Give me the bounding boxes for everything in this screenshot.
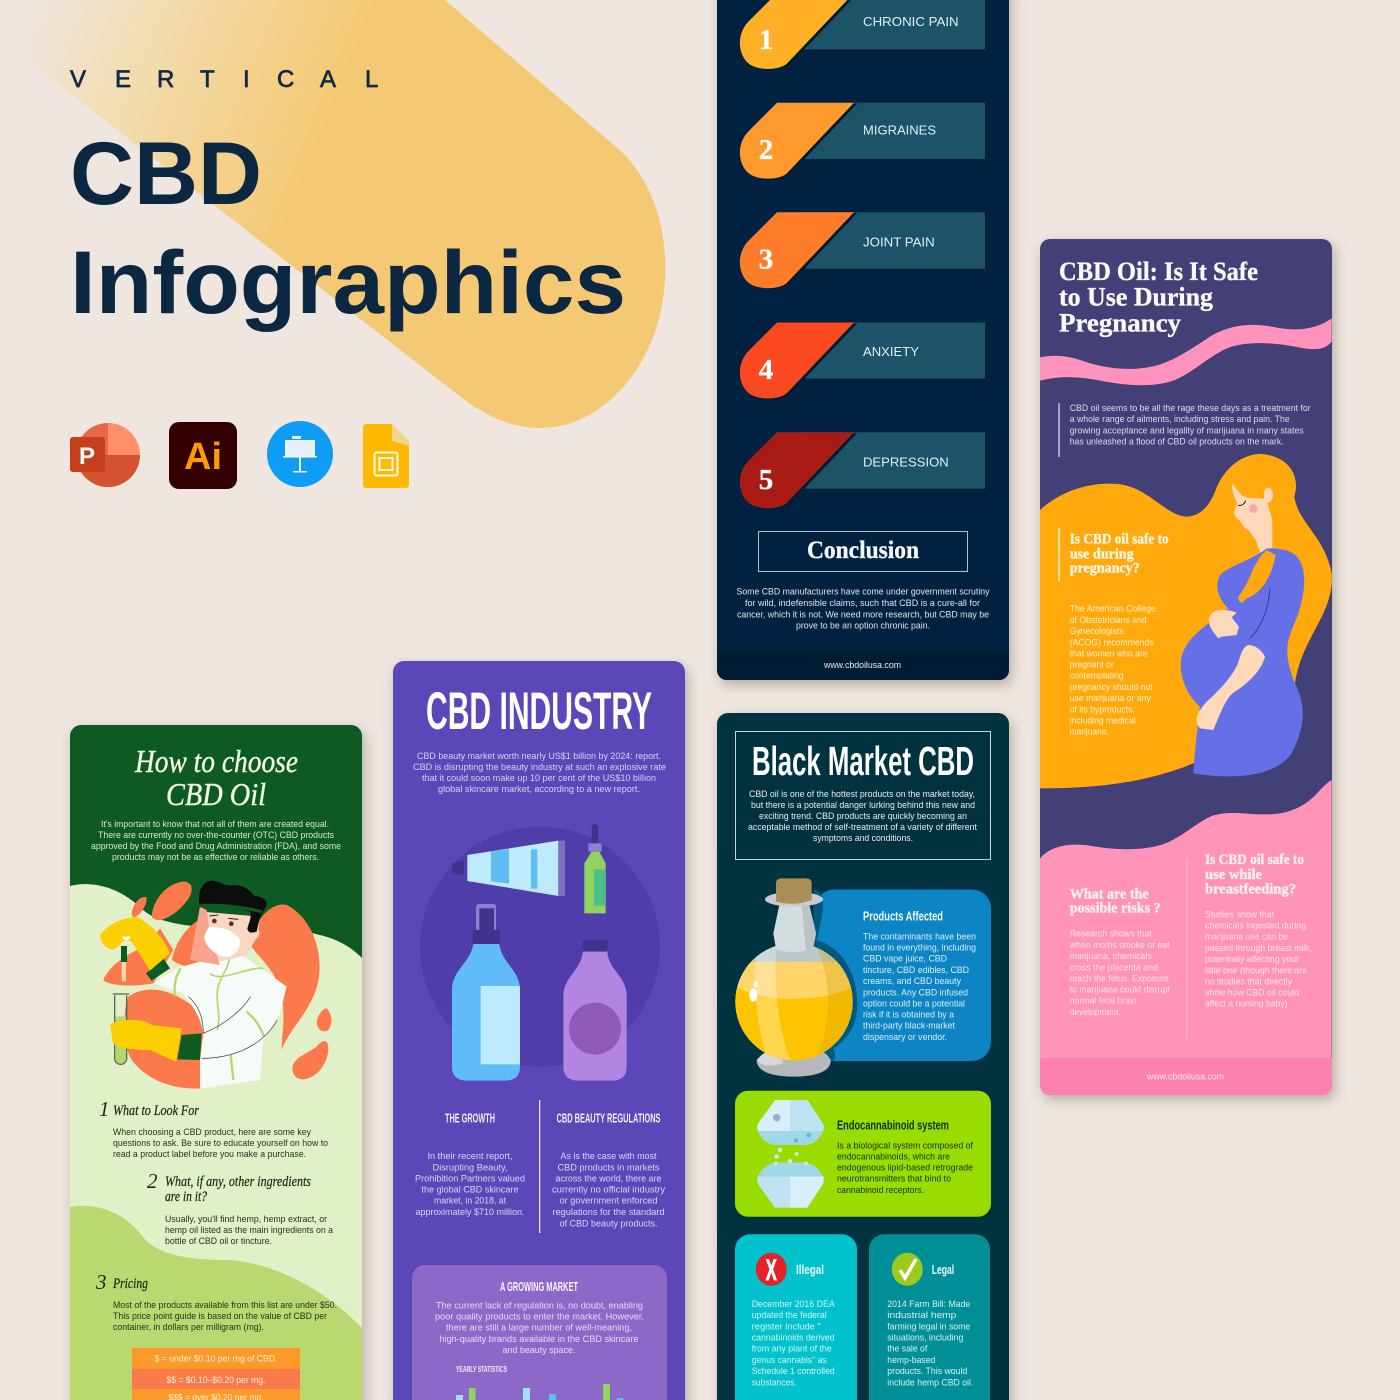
- intro text: CBD oil seems to be all the rage these days as a treatment for: [1070, 403, 1311, 413]
- card: illegal: cannabinoids derived: [752, 1332, 835, 1342]
- question: safe during pregnancy: pregnancy?: [1070, 561, 1140, 577]
- question: safe during pregnancy: pregnant or: [1070, 660, 1114, 670]
- question: breastfeeding: [1205, 852, 1312, 1009]
- heading: is it safe: [1059, 257, 1258, 338]
- card: endocannabinoid system: endogenous lipid-based retrograde: [837, 1163, 973, 1173]
- item 2: other ingredients: Usually, you'll find hemp, hemp extract, or: [165, 1214, 327, 1224]
- item 3: pricing: Most of the products available from this list are under $50.: [113, 1300, 337, 1310]
- panel: CBD industry: [393, 661, 685, 1400]
- question: breastfeeding: no studies that directly: [1205, 976, 1292, 986]
- card: a growing market: poor quality products to enter the market. However,: [435, 1312, 644, 1322]
- intro text: a whole range of ailments, including stress and pain. The: [1070, 414, 1290, 424]
- question: possible risks: cross the placenta and: [1070, 962, 1158, 972]
- item 3: pricing: This price point guide is based on the value of CBD per: [113, 1311, 327, 1321]
- card: products affected: creams, and CBD beauty: [863, 976, 961, 986]
- card: products affected: tincture, CBD edibles, CBD: [863, 965, 969, 975]
- conclusion text: Some CBD manufacturers have come under government scrutiny: [736, 587, 990, 597]
- header frame: exciting trend. CBD products are quickly becoming an: [759, 811, 967, 821]
- illustration: scientist with pipette: [100, 881, 331, 1089]
- question: safe during pregnancy: pregnancy should not: [1070, 682, 1153, 692]
- question: breastfeeding: marijuana use can be: [1205, 932, 1288, 942]
- item 2: other ingredients: 2: [147, 1169, 158, 1193]
- item 5: depression: 5: [759, 464, 773, 496]
- card: legal: include hemp CBD oil.: [887, 1377, 973, 1387]
- header frame: Black Market CBD: [752, 738, 974, 784]
- panel: black market CBD: [717, 713, 1009, 1400]
- question: breastfeeding: passed through breast milk,: [1205, 943, 1312, 953]
- column: CBD beauty regulations: regulations for the standard: [552, 1207, 665, 1217]
- card: a growing market: high-quality brands available in the CBD skincare: [440, 1334, 639, 1344]
- item 4: anxiety: ANXIETY: [863, 344, 919, 359]
- pink lower section: [1040, 780, 1332, 1113]
- item 1: what to look for: questions to ask. Be sure to educate yourself on how to: [113, 1138, 328, 1148]
- card: legal: products. This would: [887, 1366, 967, 1376]
- panel: how to choose CBD oil: [70, 725, 362, 1400]
- item 2: migraines: MIGRAINES: [863, 123, 936, 138]
- icon: PowerPoint: P: [79, 443, 95, 470]
- question: safe during pregnancy: [1058, 528, 1169, 737]
- card: products affected: risk if it is obtained by a: [863, 1010, 955, 1020]
- intro text: It's important to know that not all of them are created equal.: [101, 818, 329, 829]
- card: legal: the sale of: [887, 1344, 928, 1354]
- question: possible risks: when moms smoke or eat: [1069, 940, 1170, 950]
- icon: red X: [756, 1253, 787, 1287]
- question: safe during pregnancy: Gynecologists: [1070, 626, 1124, 636]
- icon: PowerPoint: [70, 423, 140, 487]
- question: safe during pregnancy: The American College: [1070, 604, 1156, 614]
- heading: how to choose: CBD Oil: [166, 776, 266, 812]
- heading: how to choose: How to choose: [134, 743, 298, 779]
- item 1: what to look for: [99, 1097, 328, 1159]
- heading: CBD industry: CBD INDUSTRY: [426, 682, 652, 741]
- intro text: [413, 751, 666, 794]
- intro text: CBD beauty market worth nearly US$1 billion by 2024: report.: [417, 751, 661, 761]
- question: breastfeeding: Studies show that: [1205, 909, 1274, 919]
- item 4: anxiety: 4: [759, 354, 773, 386]
- column: the growth: In their recent report,: [428, 1151, 512, 1161]
- card: legal: Legal: [932, 1262, 954, 1277]
- icon: Illustrator: Ai: [184, 436, 222, 478]
- question: breastfeeding: use while: [1205, 867, 1262, 883]
- card: a growing market: and beauty space.: [502, 1345, 576, 1355]
- header frame: symptoms and conditions.: [813, 833, 913, 843]
- heading: how to choose: [134, 750, 298, 806]
- question: possible risks: What are the: [1070, 886, 1149, 902]
- question: possible risks: marijuana, chemicals: [1070, 951, 1152, 961]
- card: products affected: products. Any CBD infused: [863, 987, 968, 997]
- card: legal: farming legal in some: [887, 1321, 970, 1331]
- card: legal: hemp-based: [887, 1355, 935, 1365]
- column: CBD beauty regulations: across the world, there are: [556, 1173, 662, 1183]
- question: safe during pregnancy: use marijuana or any: [1070, 693, 1151, 703]
- heading: is it safe: to Use During: [1059, 283, 1213, 312]
- intro text: products may not be as effective or reliable as others.: [112, 851, 319, 862]
- card: illegal: genus cannabis" as: [752, 1355, 827, 1365]
- item 3: pricing: container, in dollars per milligram (mg).: [113, 1322, 264, 1332]
- card: legal: situations, including: [887, 1332, 963, 1342]
- card: endocannabinoid system: [735, 1091, 991, 1217]
- card: products affected: The contaminants have been: [863, 931, 976, 941]
- card: products affected: CBD vape juice, CBD: [863, 954, 947, 964]
- column: CBD beauty regulations: of CBD beauty products.: [560, 1218, 658, 1228]
- item 1: chronic pain: 1: [759, 24, 773, 56]
- question: safe during pregnancy: marijuana.: [1070, 727, 1109, 737]
- heading: is it safe: CBD Oil: Is It Safe: [1059, 257, 1258, 286]
- icon: Illustrator: [169, 422, 237, 489]
- footer: [1040, 1058, 1332, 1096]
- conclusion text: [736, 587, 990, 630]
- question: breastfeeding: little one (though there are: [1205, 965, 1307, 975]
- card: legal: [869, 1234, 990, 1400]
- decorative yellow band: [25, 0, 665, 428]
- icon: green check: [892, 1253, 923, 1286]
- item 3: pricing: [95, 1270, 337, 1332]
- question: breastfeeding: potentially affecting your: [1205, 954, 1299, 964]
- intro text: There are currently no over-the-counter (OTC) CBD products: [98, 829, 334, 840]
- item 3: joint pain: [740, 212, 985, 289]
- card: products affected: found in everything, including: [863, 943, 976, 953]
- item 4: anxiety: [740, 322, 985, 399]
- column: the growth: THE GROWTH: [445, 1111, 495, 1126]
- title: CBD Infographics: Infographics: [70, 232, 626, 332]
- card: illegal: substances.: [752, 1377, 797, 1387]
- card: illegal: [735, 1234, 857, 1400]
- footer: www.cbdoilusa.com: [1146, 1071, 1224, 1081]
- intro text: growing acceptance and legality of marijuana in many states: [1070, 425, 1304, 435]
- question: safe during pregnancy: of Obstetricians and: [1070, 615, 1147, 625]
- card: a growing market: A GROWING MARKET: [500, 1280, 578, 1294]
- card: illegal: Illegal: [796, 1262, 824, 1277]
- item 5: depression: DEPRESSION: [863, 455, 949, 470]
- card: endocannabinoid system: endocannabinoids, which are: [837, 1151, 950, 1161]
- card: legal: 2014 Farm Bill: Made: [887, 1299, 970, 1309]
- item 1: chronic pain: CHRONIC PAIN: [863, 14, 959, 29]
- conclusion text: prove to be an option chronic pain.: [796, 620, 930, 630]
- item 1: what to look for: read a product label before you make a purchase.: [113, 1149, 306, 1159]
- card: endocannabinoid system: neurotransmitters that bind to: [837, 1174, 951, 1184]
- card: illegal: Schedule 1 controlled: [752, 1366, 835, 1376]
- card: products affected: [815, 890, 991, 1061]
- question: possible risks: reach the fetus. Exposure: [1070, 973, 1169, 983]
- item 3: joint pain: 3: [759, 244, 773, 276]
- card: illegal: updated the federal: [752, 1310, 827, 1320]
- question: breastfeeding: Is CBD oil safe to: [1205, 852, 1304, 868]
- conclusion text: for wild, indefensible claims, such that CBD is a cure-all for: [745, 598, 980, 608]
- item 1: what to look for: When choosing a CBD product, here are some key: [113, 1127, 311, 1137]
- item 1: chronic pain: [740, 0, 985, 70]
- header frame: acceptable method of self-treatment of a variety of different: [748, 822, 977, 832]
- column: CBD beauty regulations: As is the case with most: [560, 1151, 657, 1161]
- question: safe during pregnancy: of its byproducts,: [1070, 704, 1135, 714]
- card: products affected: option could be a potential: [863, 998, 965, 1008]
- footer: www.cbdoilusa.com: [823, 660, 901, 670]
- footer: [717, 651, 1009, 681]
- card: endocannabinoid system: Endocannabinoid system: [837, 1117, 949, 1132]
- item 2: migraines: 2: [759, 134, 773, 166]
- column: the growth: the global CBD skincare: [422, 1185, 519, 1195]
- illustration: oil flask: [733, 878, 857, 1077]
- intro text: that it could soon make up 10 per cent of the US$10 billion: [422, 773, 656, 783]
- card: products affected: Products Affected: [863, 909, 943, 924]
- column: CBD beauty regulations: CBD BEAUTY REGULATIONS: [556, 1111, 661, 1126]
- question: possible risks: development.: [1070, 1007, 1121, 1017]
- column: the growth: approximately $710 million.: [416, 1207, 524, 1217]
- card: illegal: register include ": [752, 1321, 821, 1331]
- card: a growing market: The current lack of regulation is, no doubt, enabling: [436, 1300, 643, 1310]
- title: CBD Infographics: [70, 123, 626, 332]
- illustration: pregnant woman with flowing hair: [1040, 454, 1332, 788]
- item 2: other ingredients: bottle of CBD oil or tincture.: [165, 1236, 272, 1246]
- question: breastfeeding: chemicals ingested during: [1205, 921, 1306, 931]
- item 2: other ingredients: What, if any, other ingredients: [165, 1174, 311, 1190]
- conclusion box: [758, 532, 968, 572]
- intro text: CBD is disrupting the beauty industry at such an explosive rate: [413, 762, 666, 772]
- header frame: but there is a potential danger lurking behind this new and: [751, 800, 975, 810]
- icon: red X: X: [766, 1254, 777, 1287]
- question: possible risks: possible risks ?: [1070, 901, 1161, 917]
- card: illegal: December 2016 DEA: [752, 1299, 836, 1309]
- column: the growth: [415, 1111, 525, 1217]
- column: CBD beauty regulations: currently no official industry: [552, 1185, 666, 1195]
- column: CBD beauty regulations: [552, 1111, 666, 1228]
- intro text: [91, 818, 341, 862]
- conclusion text: cancer, which it is not. We need more research, but CBD may be: [737, 609, 989, 619]
- item 1: what to look for: 1: [99, 1097, 110, 1121]
- conclusion box: Conclusion: [807, 537, 919, 564]
- question: safe during pregnancy: use during: [1070, 546, 1134, 562]
- question: breastfeeding: affect a nursing baby).: [1205, 999, 1290, 1009]
- panel: conditions list and conclusion: [717, 0, 1009, 681]
- heading: is it safe: Pregnancy: [1059, 309, 1181, 338]
- question: possible risks: normal fetal brain: [1070, 996, 1137, 1006]
- card: illegal: from any plant of the: [752, 1344, 832, 1354]
- intro text: global skincare market, according to a new report.: [438, 784, 640, 794]
- column: the growth: Prohibition Partners valued: [415, 1173, 525, 1183]
- intro text: [1058, 403, 1311, 457]
- panel: CBD oil and pregnancy: [1040, 239, 1332, 1113]
- question: safe during pregnancy: that women who are: [1070, 648, 1148, 658]
- column: CBD beauty regulations: or government enforced: [560, 1196, 658, 1206]
- header frame: [736, 732, 990, 860]
- bar chart: yearly statistics: YEARLY STATISTICS: [456, 1364, 507, 1374]
- item 2: other ingredients: are in it?: [165, 1189, 207, 1205]
- card: products affected: dispensary or vendor.: [863, 1032, 947, 1042]
- item 2: other ingredients: hemp oil listed as the main ingredients on a: [165, 1225, 334, 1235]
- card: products affected: third-party black-market: [863, 1021, 955, 1031]
- item 2: migraines: [740, 103, 985, 180]
- item 3: joint pain: JOINT PAIN: [863, 235, 935, 250]
- question: safe during pregnancy: (ACOG) recommends: [1070, 637, 1154, 647]
- header frame: CBD oil is one of the hottest products on the market today,: [749, 789, 975, 799]
- card: endocannabinoid system: Is a biological system composed of: [837, 1140, 973, 1150]
- column: the growth: Disrupting Beauty,: [432, 1162, 508, 1172]
- card: legal: industrial hemp: [887, 1310, 956, 1320]
- item 3: pricing: 3: [95, 1270, 106, 1294]
- bar chart: yearly statistics: [456, 1364, 624, 1400]
- intro text: approved by the Food and Drug Administration (FDA), and some: [91, 840, 341, 851]
- price table: [132, 1348, 300, 1400]
- item 1: what to look for: What to Look For: [113, 1103, 199, 1119]
- column: CBD beauty regulations: CBD products in markets: [558, 1162, 660, 1172]
- question: possible risks: Research shows that: [1070, 929, 1152, 939]
- question: breastfeeding: show how CBD oil could: [1205, 988, 1299, 998]
- card: a growing market: [412, 1265, 667, 1400]
- icon: Keynote: [267, 421, 333, 487]
- question: safe during pregnancy: including medical: [1070, 715, 1136, 725]
- price table: $ = under $0.10 per mg of CBD.: [154, 1354, 278, 1364]
- item 2: other ingredients: [147, 1169, 334, 1246]
- card: endocannabinoid system: cannabinoid receptors.: [837, 1185, 924, 1195]
- question: possible risks: [1069, 886, 1170, 1017]
- intro text: has unleashed a flood of CBD oil products on the mark.: [1070, 436, 1284, 446]
- pink wave: [1040, 318, 1332, 385]
- question: safe during pregnancy: contemplating: [1070, 671, 1124, 681]
- title: CBD Infographics: CBD: [70, 123, 262, 223]
- question: safe during pregnancy: Is CBD oil safe to: [1070, 531, 1169, 547]
- icon: Google Slides: [363, 424, 409, 488]
- icon: split molecule flask: [757, 1100, 824, 1208]
- question: breastfeeding: breastfeeding?: [1205, 882, 1296, 898]
- column: the growth: market, in 2018, at: [434, 1196, 507, 1206]
- card: a growing market: there are still a large number of well-meaning,: [446, 1323, 632, 1333]
- item 5: depression: [740, 432, 985, 509]
- item 3: pricing: Pricing: [112, 1276, 148, 1292]
- eyebrow: vertical: VERTICAL: [70, 66, 378, 93]
- price table: $$ = $0.10–$0.20 per mg.: [166, 1375, 266, 1385]
- illustration: cosmetic bottles: [420, 824, 660, 1081]
- question: possible risks: to marijuana could disrupt: [1070, 985, 1170, 995]
